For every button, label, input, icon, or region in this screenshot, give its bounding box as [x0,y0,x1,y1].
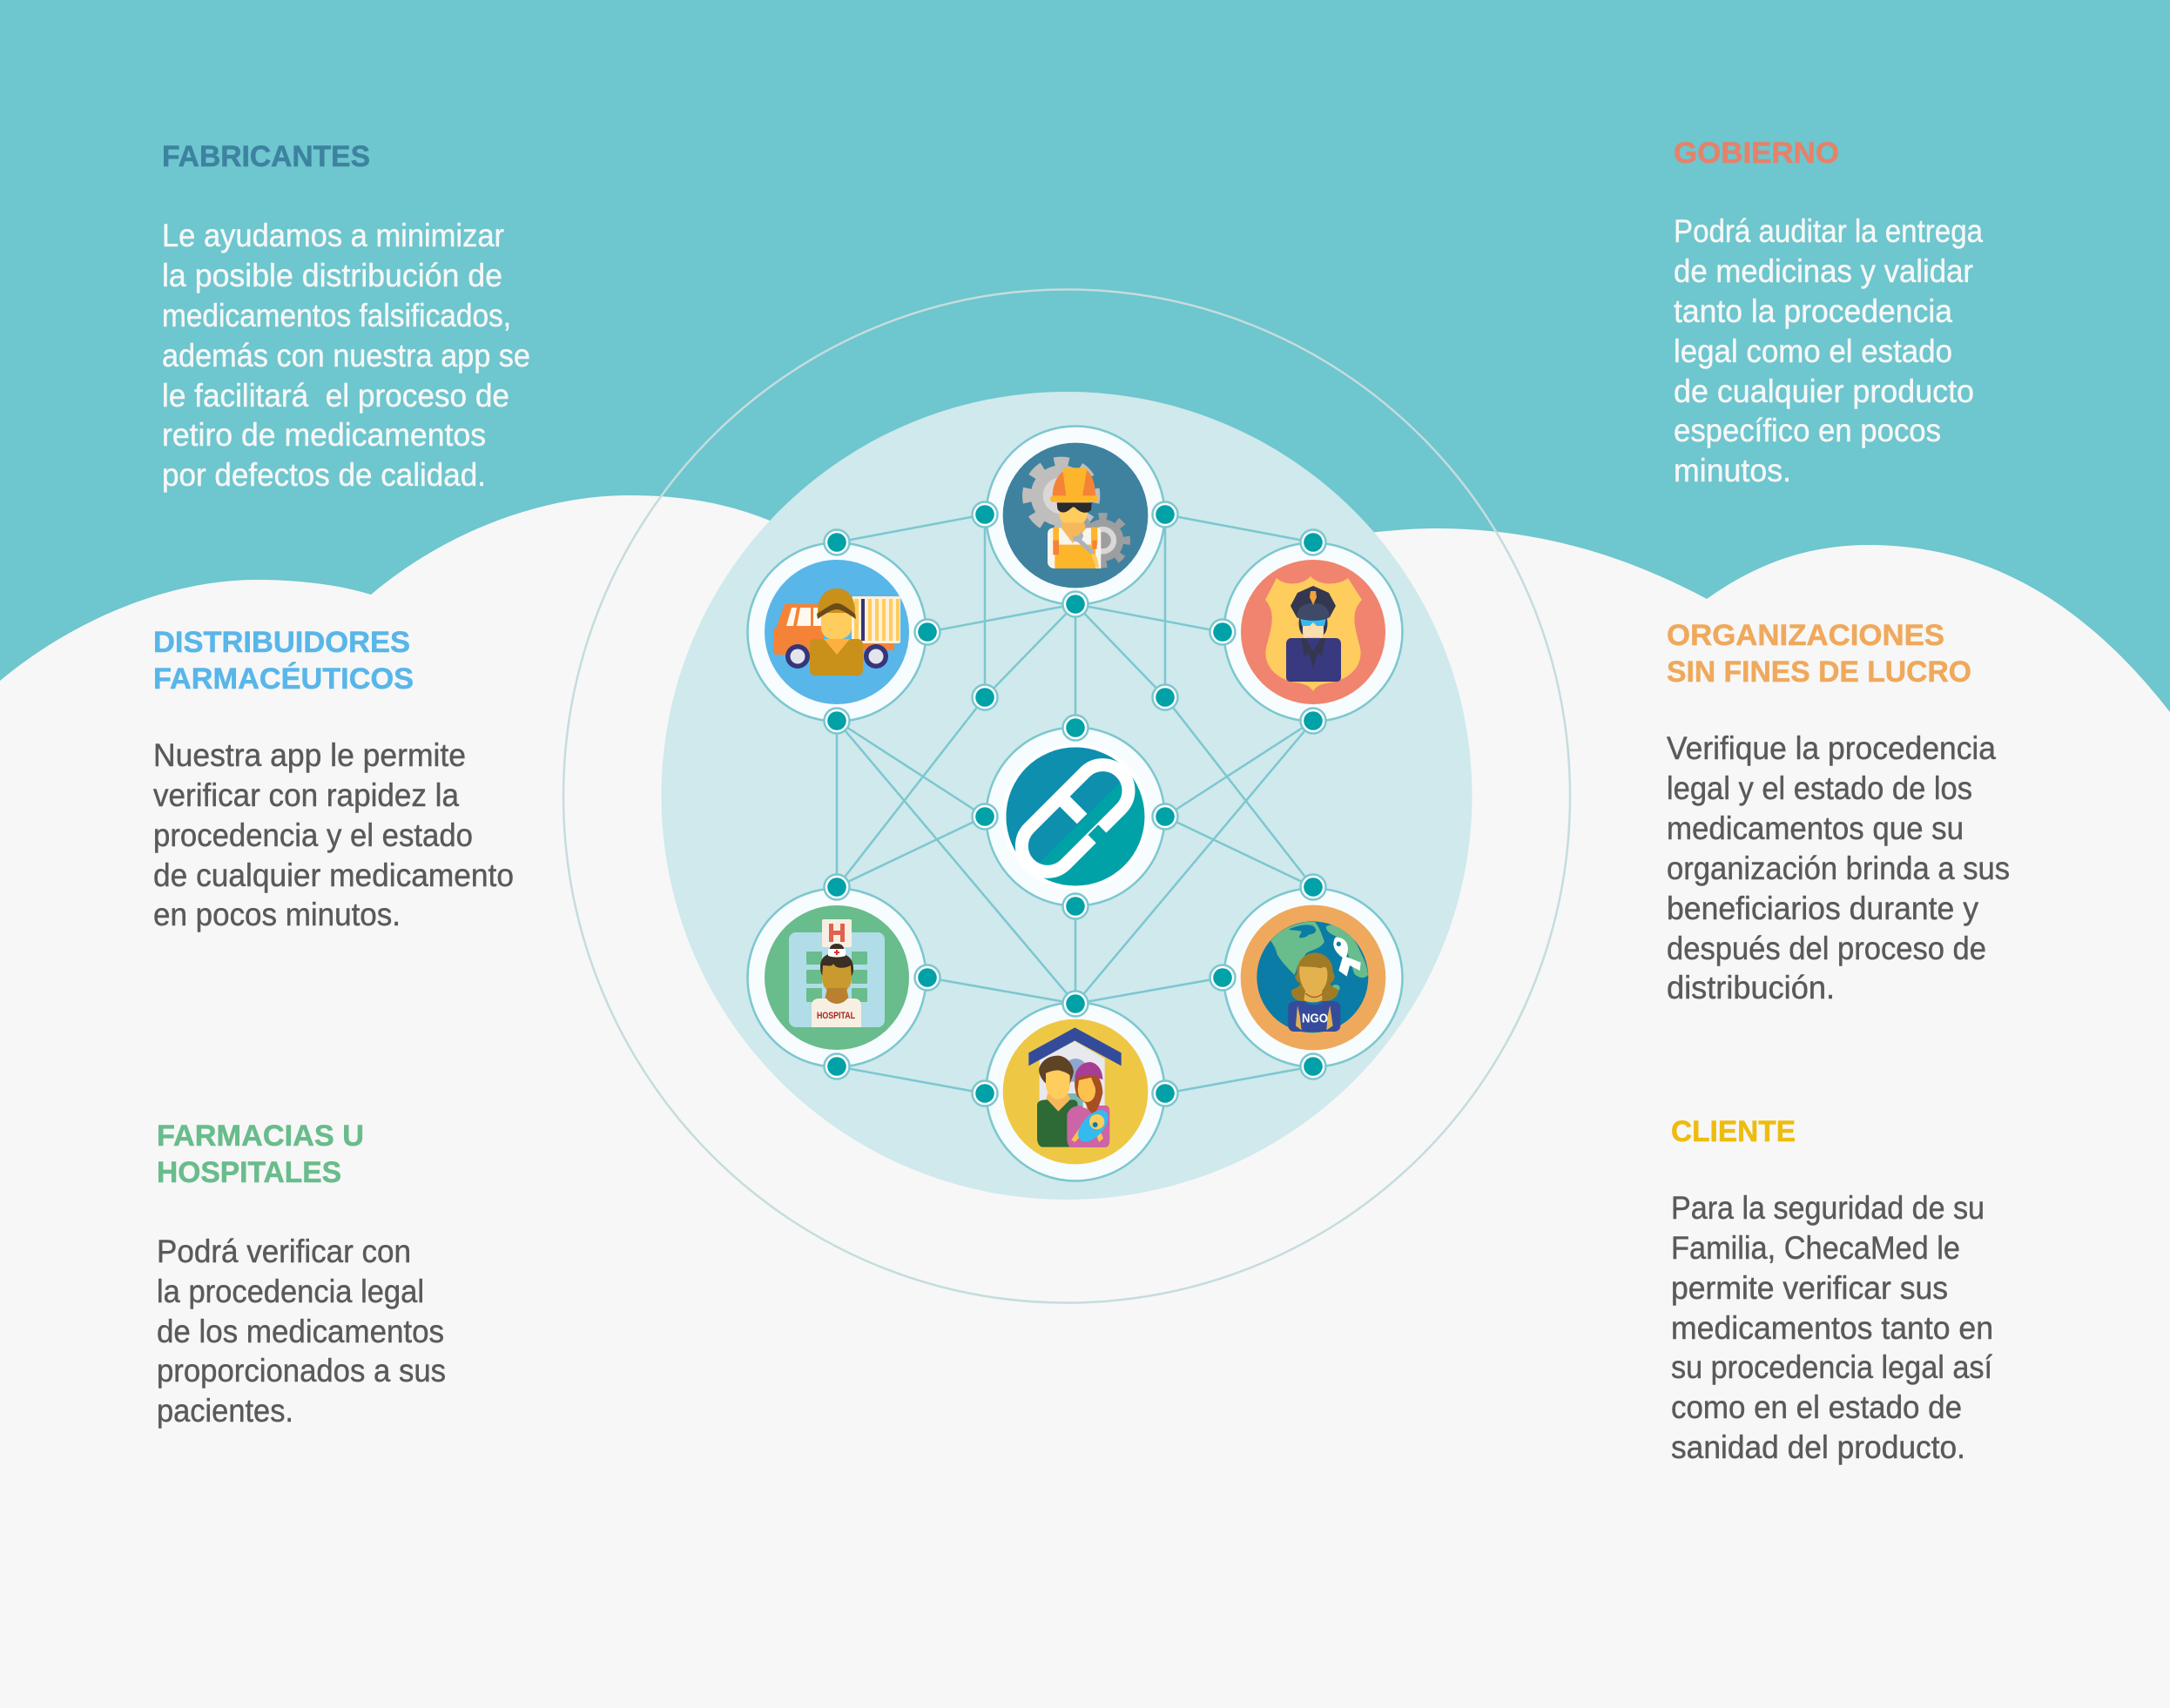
text block: cliente body: permite verificar sus [1671,1270,1948,1306]
heading: farmacias u hospitales [157,1120,364,1189]
text block: gobierno body: de cualquier producto [1674,373,1974,409]
text block: organizaciones body [1667,730,2010,1005]
text block: cliente body [1671,1190,1993,1465]
text block: fabricantes body: le facilitará el proceso de [162,378,509,414]
text block: cliente body: su procedencia legal así [1671,1349,1993,1385]
heading: cliente: CLIENTE [1671,1115,1796,1148]
text block: gobierno body: legal como el estado [1674,333,1952,369]
text block: cliente body: como en el estado de [1671,1389,1962,1425]
panel: fabricantes [162,140,530,493]
text block: organizaciones body: organización brinda a sus [1667,851,2010,886]
text block: distribuidores body: Nuestra app le permite [153,737,466,773]
icon: client family at home [986,1003,1165,1180]
text block: gobierno body: minutos. [1674,453,1791,488]
heading: organizaciones sin fines de lucro: SIN FINES DE LUCRO [1667,656,1971,689]
thin outer circle [563,289,1570,1302]
heading: farmacias u hospitales: FARMACIAS U [157,1120,364,1153]
icon: central capsule logo [986,728,1165,906]
text block: fabricantes body: además con nuestra app se [162,338,530,373]
text block: fabricantes body: Le ayudamos a minimizar [162,218,504,253]
text block: gobierno body: específico en pocos [1674,413,1941,448]
heading: distribuidores farmacéuticos: DISTRIBUIDORES [153,626,410,659]
text block: fabricantes body [162,218,530,493]
heading: gobierno: GOBIERNO [1674,137,1839,170]
icon: hospital nurse [747,888,927,1067]
icon: manufacturer engineer [986,427,1165,604]
label: HOSPITAL: HOSPITAL [817,1011,855,1021]
text block: fabricantes body: la posible distribución de [162,258,502,293]
heading: distribuidores farmacéuticos [153,626,414,696]
text block: farmacias body: proporcionados a sus [157,1353,446,1389]
text block: organizaciones body: beneficiarios durante y [1667,891,1978,926]
text block: farmacias body [157,1234,446,1429]
panel: farmacias u hospitales [157,1120,446,1429]
text block: farmacias body: Podrá verificar con [157,1234,411,1269]
heading: organizaciones sin fines de lucro [1667,619,1971,689]
text block: gobierno body: de medicinas y validar [1674,253,1973,289]
text block: distribuidores body [153,737,514,932]
heading: farmacias u hospitales: HOSPITALES [157,1156,341,1189]
background: light cloud wave [0,495,2170,1708]
network connection lines [837,514,1313,1093]
text block: farmacias body: pacientes. [157,1393,293,1429]
label: NGO: NGO [1302,1012,1328,1025]
text block: distribuidores body: procedencia y el estado [153,817,473,853]
text block: organizaciones body: Verifique la procedencia [1667,730,1996,766]
text block: gobierno body: tanto la procedencia [1674,293,1952,329]
icon: distributor truck driver [747,543,927,721]
panel: organizaciones sin fines de lucro [1667,619,2010,1005]
text block: gobierno body: Podrá auditar la entrega [1674,213,1983,249]
text block: fabricantes body: retiro de medicamentos [162,417,486,453]
text block: cliente body: medicamentos tanto en [1671,1310,1993,1346]
text block: cliente body: sanidad del producto. [1671,1429,1965,1465]
text block: organizaciones body: distribución. [1667,970,1835,1005]
text block: cliente body: Para la seguridad de su [1671,1190,1985,1226]
text block: organizaciones body: legal y el estado de los [1667,770,1972,806]
text block: distribuidores body: en pocos minutos. [153,897,401,932]
text block: organizaciones body: después del proceso de [1667,931,1986,966]
text block: fabricantes body: por defectos de calidad. [162,457,486,493]
text block: gobierno body [1674,213,1983,488]
text block: farmacias body: de los medicamentos [157,1314,444,1349]
panel: distribuidores farmacéuticos [153,626,514,932]
icon: government police officer [1224,543,1402,721]
text block: distribuidores body: de cualquier medicamento [153,857,514,893]
light central disc [662,392,1472,1200]
text block: farmacias body: la procedencia legal [157,1274,424,1309]
heading: distribuidores farmacéuticos: FARMACÉUTICOS [153,662,414,696]
heading: fabricantes: FABRICANTES [162,140,370,173]
heading: organizaciones sin fines de lucro: ORGANIZACIONES [1667,619,1944,652]
text block: cliente body: Familia, ChecaMed le [1671,1230,1960,1266]
text block: organizaciones body: medicamentos que su [1667,810,1964,846]
network connection nodes [824,501,1325,1106]
panel: gobierno [1674,137,1983,488]
text block: fabricantes body: medicamentos falsificados, [162,298,511,333]
icon: NGO volunteer with globe [1224,888,1402,1067]
text block: distribuidores body: verificar con rapidez la [153,777,459,813]
panel: cliente [1671,1115,1993,1465]
